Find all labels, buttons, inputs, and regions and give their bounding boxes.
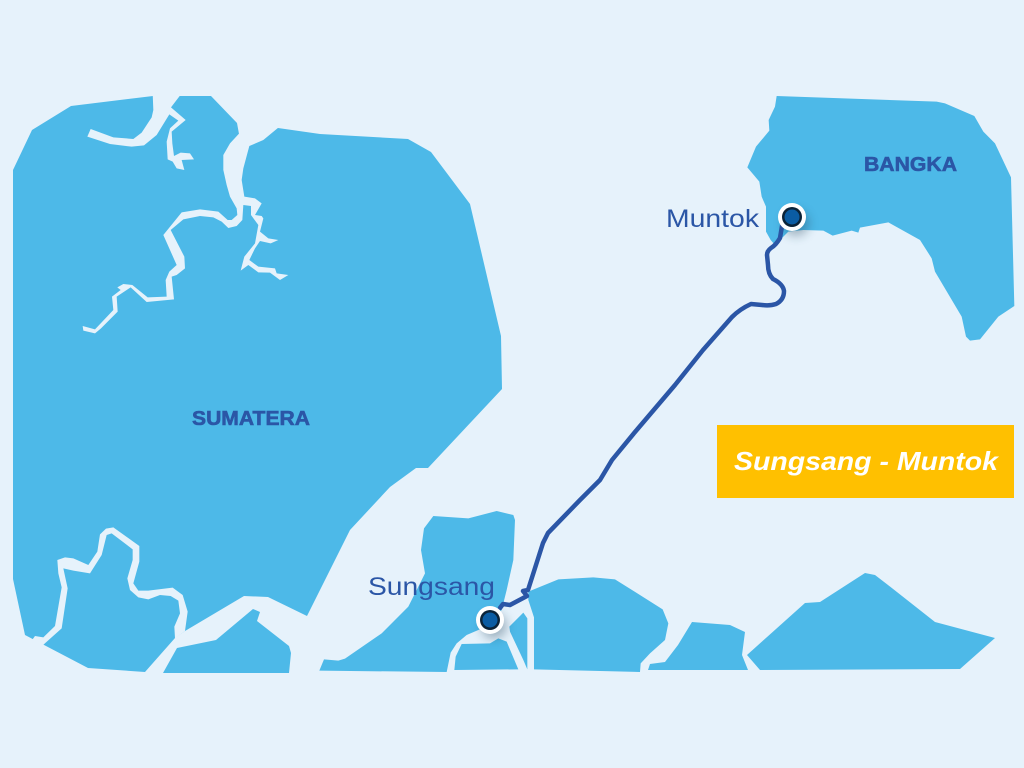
label: Sungsang: Sungsang — [368, 573, 495, 601]
river: northern bay — [87, 93, 194, 170]
route line — [500, 226, 784, 608]
island: Bangka — [747, 96, 1014, 341]
label: BANGKA: BANGKA — [864, 154, 957, 176]
landmass: Sumatera — [13, 93, 502, 672]
island: south of Sumatera — [163, 609, 291, 673]
island: far south-east — [747, 573, 995, 670]
island: small southern — [648, 622, 748, 670]
island: Sungsang delta — [319, 511, 668, 672]
marker: Sungsang — [476, 606, 507, 639]
title: Sungsang - Muntok — [734, 446, 1000, 476]
river: central estuary — [83, 120, 288, 333]
label: SUMATERA: SUMATERA — [192, 408, 310, 430]
title box — [717, 425, 1014, 498]
river: southern — [32, 527, 188, 645]
marker: Muntok — [778, 203, 809, 236]
label: Muntok: Muntok — [666, 205, 760, 233]
